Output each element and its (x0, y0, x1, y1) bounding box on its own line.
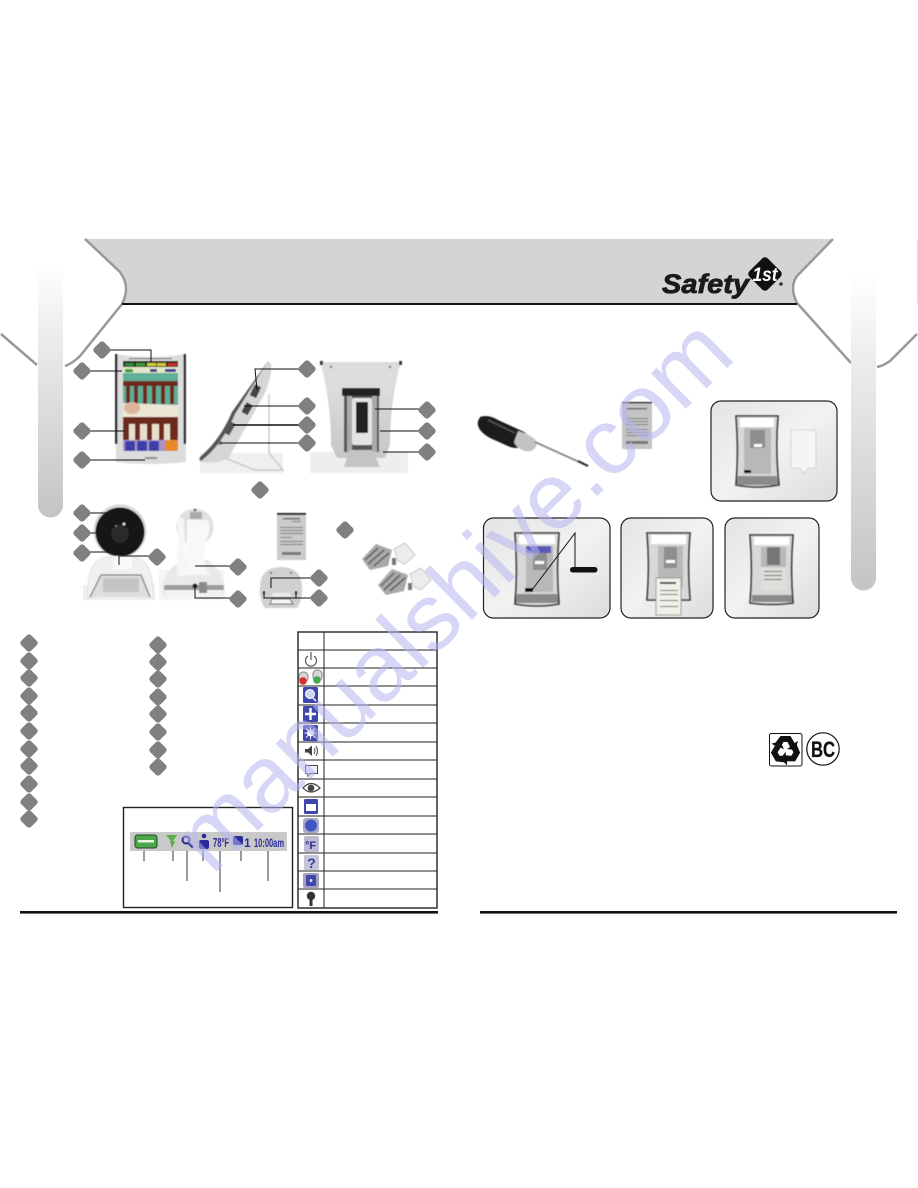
icon: zoom (303, 687, 318, 703)
monitor front photo (115, 354, 186, 464)
status ticks (144, 851, 268, 892)
camera front photo (83, 504, 155, 600)
number badges on photos (72, 340, 437, 609)
monitor side photo (199, 361, 283, 473)
BC recycling mark (807, 733, 839, 765)
connector callout (532, 533, 598, 590)
panel: back with cover removed (711, 401, 837, 501)
icon: locks (299, 670, 322, 685)
logo: Safety 1st: 1st (752, 265, 778, 286)
icon: screen (306, 766, 318, 776)
monitor back photo (310, 361, 408, 473)
icon: power (306, 652, 316, 666)
legend badges, left column (19, 633, 39, 829)
icon: globe (303, 818, 319, 833)
footer rule left (20, 911, 438, 914)
right side tab (851, 275, 876, 590)
zoom status icon (182, 836, 193, 848)
panel: step insert battery (621, 518, 713, 618)
logo: Safety 1st: Safety (662, 269, 751, 299)
battery status icon (135, 835, 157, 848)
logo: Safety 1st (662, 256, 783, 299)
camera number readout: 1 (244, 836, 251, 850)
screwdriver photo (478, 416, 588, 466)
legend badges, right column (148, 635, 168, 777)
status bar panel (124, 808, 292, 908)
icon: pan tilt (303, 706, 318, 722)
icon: eye (303, 784, 320, 792)
footer rule right (480, 911, 897, 914)
signal icon (166, 835, 177, 848)
recycle symbol (767, 734, 803, 768)
icon: speaker (305, 746, 318, 756)
icon: temperature: °F (305, 840, 316, 852)
icon: camera (303, 873, 319, 888)
icon: help: ? (307, 855, 316, 871)
left side tab (38, 265, 63, 518)
BC recycling mark: BC (811, 737, 835, 762)
header band (1, 239, 918, 367)
power adapters photo (362, 543, 431, 595)
camera base photo (260, 567, 302, 608)
icon table (298, 632, 437, 908)
temperature readout: 78°F (213, 836, 229, 850)
panel: step locate compartment (484, 518, 610, 618)
watermark: manualshive.com (152, 297, 752, 890)
battery photo (277, 513, 306, 560)
pan tilt status icon (199, 834, 209, 849)
replacement battery photo (622, 402, 652, 449)
icon: brightness (303, 725, 318, 741)
camera number readout (233, 836, 251, 850)
icon: help (304, 855, 319, 871)
panel: step battery installed (725, 518, 819, 618)
icon: menu (304, 799, 318, 814)
camera back photo (159, 508, 225, 600)
leader lines (90, 350, 420, 598)
icon: temperature (304, 836, 319, 852)
clock readout: 10:00am (254, 836, 284, 850)
icon: bulb (307, 892, 315, 906)
battery cover (791, 430, 816, 474)
